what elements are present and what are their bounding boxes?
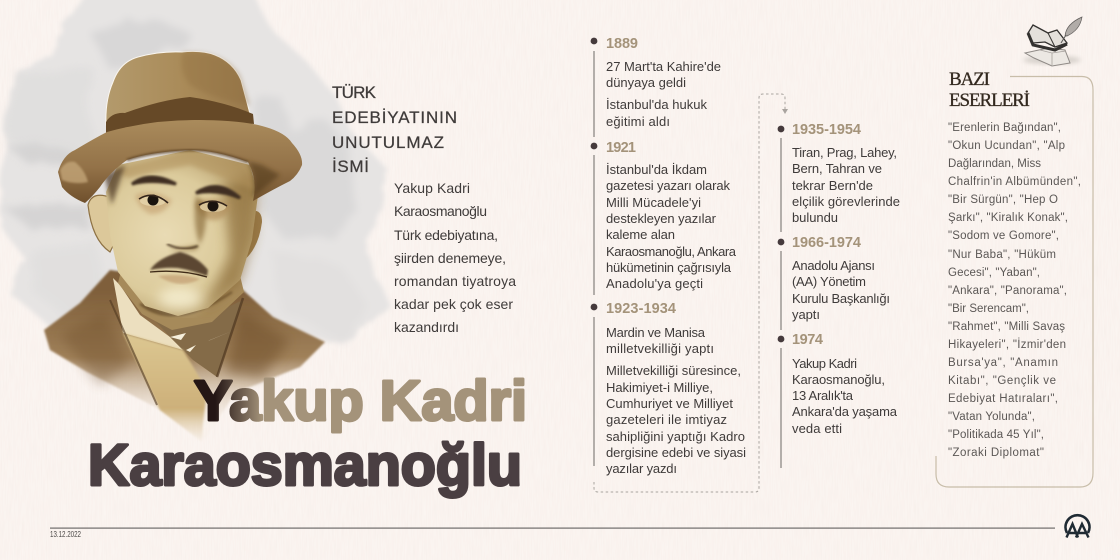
event: 1966-1974: Kurulu Başkanlığı: [792, 291, 890, 306]
event: 1889: 27 Mart'ta Kahire'de: [606, 59, 721, 74]
event: 1923-1934: gazeteleri ile imtiyaz: [606, 412, 727, 427]
event: 1923-1934: sahipliğini yaptığı Kadro: [606, 429, 745, 444]
portrait: hat crown: [106, 51, 253, 125]
portrait: hat brim: [58, 120, 302, 203]
event: 1921: 1921: [606, 140, 636, 156]
event: 1923-1934: yazılar yazdı: [606, 461, 677, 476]
portrait: moustache: [150, 252, 208, 276]
icon: AA logo: [1066, 515, 1090, 538]
text block: introduction: romandan tiyatroya: [394, 273, 516, 289]
heading: subtitle: [332, 83, 457, 176]
panel heading: ESERLERİ: [949, 90, 1030, 111]
event: 1889: eğitimi aldı: [606, 114, 670, 129]
heading: subtitle: EDEBİYATININ: [332, 108, 457, 127]
event: 1921: kaleme alan: [606, 227, 675, 242]
event: 1921: [606, 140, 737, 291]
event: 1966-1974: yaptı: [792, 307, 820, 322]
heading: subtitle: UNUTULMAZ: [332, 133, 444, 152]
event: 1974: [792, 332, 898, 436]
text block: introduction: kazandırdı: [394, 319, 459, 335]
event: 1923-1934: Milletvekilliği süresince,: [606, 363, 741, 378]
event: 1921: hükümetinin çağrısıyla: [606, 260, 732, 275]
panel list of works: Hikayeleri", "İzmir'den: [948, 338, 1066, 351]
event: 1935-1954: 1935-1954: [792, 122, 861, 138]
timeline dots: [591, 38, 597, 310]
portrait: hat band: [106, 97, 254, 133]
heading: subtitle: TÜRK: [332, 83, 377, 102]
event: 1974: Karaosmanoğlu,: [792, 372, 885, 387]
panel heading: BAZI: [949, 69, 990, 90]
arrow: dashed connector between columns: [594, 94, 788, 492]
panel: selected works: [936, 69, 1093, 487]
panel list of works: Dağlarından, Miss: [948, 158, 1041, 170]
event: 1974: veda etti: [792, 421, 842, 436]
portrait: eyes: [140, 196, 166, 206]
panel list of works: Edebiyat Hatıraları",: [948, 393, 1058, 405]
panel list of works: Kitabı", "Gençlik ve: [948, 375, 1056, 387]
event: 1889: İstanbul'da hukuk: [606, 97, 708, 112]
event: 1923-1934: Hakimiyet-i Milliye,: [606, 380, 713, 395]
portrait: lapel: [123, 333, 207, 442]
text block: introduction: şiirden denemeye,: [394, 250, 506, 266]
panel frame: [936, 76, 1093, 487]
text block: introduction: Yakup Kadri: [394, 180, 470, 196]
panel list of works: "Politikada 45 Yıl",: [948, 429, 1044, 441]
event: 1935-1954: [792, 122, 900, 225]
text block: introduction: kadar pek çok eser: [394, 296, 513, 312]
timeline: left column: [591, 36, 746, 476]
event: 1974: Yakup Kadri: [792, 356, 857, 371]
panel list of works: "Bir Serencam",: [948, 303, 1029, 315]
event: 1974: 1974: [792, 332, 823, 348]
portrait: coat: [44, 270, 325, 440]
event: 1923-1934: dergisine edebi ve siyasi: [606, 445, 746, 460]
portrait: eyebrows: [132, 177, 240, 198]
panel heading: [949, 69, 1030, 111]
panel list of works: "Rahmet", "Milli Savaş: [948, 321, 1065, 333]
timeline dots: [778, 126, 784, 342]
event: 1921: Anadolu'ya geçti: [606, 276, 703, 291]
event: 1935-1954: Bern, Tahran ve: [792, 161, 882, 176]
portrait: right ear: [240, 211, 262, 263]
text block: introduction: Karaosmanoğlu: [394, 203, 487, 219]
event: 1935-1954: tekrar Bern'de: [792, 178, 873, 193]
main title: [88, 369, 527, 498]
portrait: grey watercolour wash: [0, 0, 388, 345]
event: 1921: Milli Mücadele'yi: [606, 195, 701, 210]
panel list of works: Şarkı", "Kiralık Konak",: [948, 212, 1068, 224]
event: 1935-1954: Tiran, Prag, Lahey,: [792, 145, 897, 160]
event: 1935-1954: elçilik görevlerinde: [792, 194, 900, 209]
heading: subtitle: İSMİ: [332, 157, 369, 176]
event: 1974: 13 Aralık'ta: [792, 388, 854, 403]
portrait: neck: [118, 255, 244, 330]
portrait: man with hat: [44, 51, 325, 442]
panel list of works: "Vatan Yolunda",: [948, 411, 1035, 423]
panel list of works: "Erenlerin Bağından",: [948, 122, 1061, 134]
event: 1923-1934: Mardin ve Manisa: [606, 325, 706, 340]
portrait: left ear: [88, 195, 116, 252]
timeline connectors: [780, 138, 782, 468]
event: 1966-1974: Anadolu Ajansı: [792, 258, 875, 273]
event: 1921: İstanbul'da İkdam: [606, 162, 707, 177]
event: 1921: gazetesi yazarı olarak: [606, 178, 730, 193]
event: 1921: destekleyen yazılar: [606, 211, 717, 226]
event: 1966-1974: 1966-1974: [792, 235, 861, 251]
event: 1974: Ankara'da yaşama: [792, 404, 898, 419]
portrait: face: [106, 150, 258, 316]
panel list of works: "Bir Sürgün", "Hep O: [948, 194, 1058, 206]
event: 1889: [606, 36, 721, 129]
main title: Yakup Kadri: [194, 369, 527, 433]
panel list of works: [948, 122, 1081, 459]
panel list of works: "Ankara", "Panorama",: [948, 285, 1067, 297]
event: 1921: Karaosmanoğlu, Ankara: [606, 244, 737, 259]
portrait: nose: [170, 195, 206, 251]
panel list of works: "Sodom ve Gomore",: [948, 230, 1059, 242]
event: 1935-1954: bulundu: [792, 210, 838, 225]
text block: introduction: [394, 180, 516, 335]
event: 1889: dünyaya geldi: [606, 75, 686, 90]
event: 1966-1974: (AA) Yönetim: [792, 274, 866, 289]
text block: introduction: Türk edebiyatına,: [394, 227, 498, 243]
timeline connectors: [593, 51, 595, 466]
panel list of works: "Zoraki Diplomat": [948, 447, 1044, 459]
main title: Karaosmanoğlu: [88, 433, 522, 498]
portrait: mouth: [150, 271, 207, 277]
portrait: tie: [150, 300, 243, 377]
panel list of works: Gecesi", "Yaban",: [948, 267, 1040, 279]
panel list of works: "Okun Ucundan", "Alp: [948, 140, 1065, 152]
event: 1966-1974: [792, 235, 890, 322]
panel list of works: Chalfrin'in Albümünden",: [948, 176, 1081, 188]
event: 1889: 1889: [606, 36, 638, 52]
event: 1923-1934: Cumhuriyet ve Milliyet: [606, 396, 733, 411]
event: 1923-1934: milletvekilliği yaptı: [606, 341, 714, 356]
footer: rule and date: 13.12.2022: [50, 530, 81, 539]
timeline: right column: [778, 122, 900, 468]
icon: book and quill: [1023, 17, 1082, 66]
panel list of works: "Nur Baba", "Hüküm: [948, 249, 1056, 261]
panel list of works: Bursa'ya", "Anamın: [948, 357, 1058, 369]
event: 1923-1934: 1923-1934: [606, 301, 676, 317]
portrait: shirt collar: [113, 278, 183, 350]
event: 1923-1934: [606, 301, 746, 476]
